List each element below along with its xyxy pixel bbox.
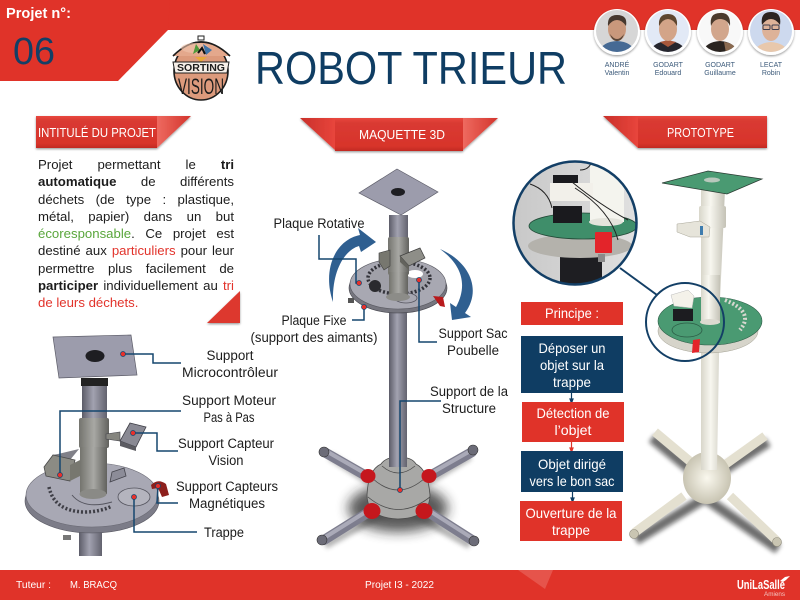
red sensor [433, 296, 445, 307]
arms [324, 450, 472, 540]
arm shadows [325, 456, 470, 545]
supports [379, 250, 390, 270]
team names: GODART [653, 62, 684, 69]
label: support microcontroleur: Support [206, 348, 254, 363]
text block: project description: automatique de différents [38, 174, 234, 189]
base dome [367, 457, 430, 519]
label: support capteurs magnetiques: Support Capteurs [176, 479, 278, 494]
base shadow [348, 484, 448, 532]
ribbon: Prototype [603, 116, 767, 148]
panel: left 3D detail view [25, 335, 279, 556]
arm ends [317, 445, 479, 546]
camera box [677, 221, 710, 237]
header band [0, 0, 800, 81]
zoom ring [646, 283, 724, 361]
team names: ANDRÉ [605, 60, 630, 69]
red part [692, 339, 700, 353]
text block: project description: participer individuellement au tri [38, 278, 234, 293]
label: support de la structure: Support de la [430, 384, 508, 399]
step: detection: l’objet [554, 422, 592, 438]
base shadow [636, 438, 778, 549]
gear [725, 300, 745, 330]
green disc [658, 297, 762, 345]
logo: Sorting Vision [173, 36, 230, 100]
footer: UniLaSalle logo: UniLaSalle [737, 578, 785, 592]
top plate [359, 169, 438, 215]
label: plaque rotative: Plaque Rotative [274, 216, 364, 231]
team names: Guillaume [704, 70, 736, 77]
rotation arrow right [440, 249, 473, 320]
text block: project description [38, 157, 234, 310]
portrait: Lecat Robin [748, 9, 794, 55]
arms [634, 432, 777, 541]
zoom connector [620, 268, 657, 295]
step: detection: Détection de [536, 405, 610, 421]
ribbon: Prototype: PROTOTYPE [667, 125, 734, 140]
footer: tutor label: Tuteur : [16, 579, 51, 591]
label: plaque fixe: Plaque Fixe [282, 313, 346, 328]
footer: project: Projet I3 - 2022 [365, 579, 434, 591]
disc lower [349, 263, 447, 313]
panel: full 3D model [250, 169, 508, 546]
footer: tutor name: M. BRACQ [70, 579, 117, 591]
gear ring [368, 262, 430, 294]
upper disc [26, 463, 158, 527]
lower disc [25, 469, 159, 533]
project number label: Projet n°: [6, 6, 71, 22]
magnetic sensor [151, 481, 169, 497]
column [82, 378, 107, 420]
footer: UniLaSalle logo [737, 576, 790, 598]
title: ROBOT TRIEUR [255, 42, 567, 94]
gear windows [369, 280, 381, 292]
upper pole over disc [701, 275, 720, 323]
label: support sac poubelle [438, 326, 508, 358]
callout dots [356, 278, 422, 492]
step: deposer [521, 336, 623, 393]
footer band [0, 570, 800, 600]
tab under disc [63, 535, 71, 540]
callout dots [58, 352, 160, 500]
arm ends [630, 530, 782, 546]
vision sensor support [106, 432, 120, 441]
ribbon: Maquette 3D [300, 118, 498, 151]
gear rack [49, 487, 112, 512]
arrow 1 [570, 393, 573, 403]
step: principe: Principe : [545, 305, 599, 321]
step: deposer: Déposer un [538, 340, 606, 356]
green plate [662, 171, 762, 194]
collar [699, 206, 726, 228]
step: deposer: objet sur la [540, 357, 604, 373]
rotation arrow left [329, 228, 376, 302]
step: objet dirige: vers le bon sac [530, 473, 614, 489]
step: detection [522, 402, 624, 442]
magnified inset [514, 160, 637, 288]
arrow 3 [571, 492, 574, 502]
trapdoor [118, 488, 150, 506]
disc upper [350, 259, 446, 309]
callout lines [319, 235, 359, 283]
team names: LECAT [760, 62, 783, 69]
label: support capteur vision: Support Capteur [178, 436, 274, 451]
text block: project description: déchets (de type : plastique, [38, 192, 234, 207]
trapdoor [672, 323, 702, 337]
side clip [348, 298, 354, 303]
step: objet dirige [521, 451, 623, 492]
team names: GODART [705, 62, 736, 69]
red joints [360, 469, 436, 519]
step: principe [521, 302, 623, 325]
white box [671, 290, 694, 308]
column [389, 215, 408, 240]
step: deposer: trappe [553, 374, 591, 390]
text block: project description: destiné aux particuliers pour leur [38, 243, 234, 258]
label: support de la structure: Structure [442, 401, 496, 416]
label: support moteur [182, 393, 276, 425]
callout lines [123, 354, 181, 363]
pole [701, 190, 725, 470]
logo: Sorting Vision: SORTING [177, 63, 225, 74]
label: support capteur vision: Vision [208, 453, 244, 468]
label: support capteurs magnetiques: Magnétiques [189, 496, 265, 511]
label: support microcontroleur [182, 348, 279, 380]
project number: 06 [13, 31, 55, 73]
top plate [53, 335, 137, 378]
logo: Sorting Vision: VISION [178, 74, 224, 99]
pole [79, 520, 102, 556]
label: support sac poubelle: Support Sac [438, 326, 508, 341]
decorative corner triangle [207, 291, 240, 323]
arrow 2 [570, 442, 573, 452]
label: support de la structure [430, 384, 508, 416]
ribbon: Intitulé du projet: INTITULÉ DU PROJET [38, 125, 156, 140]
label: support sac poubelle: Poubelle [447, 343, 499, 358]
text block: project description: Projet permettant le tri [38, 157, 234, 172]
label: support capteurs magnetiques [176, 479, 278, 511]
team portraits [594, 9, 794, 77]
portrait: Godart Guillaume [697, 9, 743, 55]
step: ouverture [520, 501, 622, 541]
portrait: André Valentin [594, 9, 640, 55]
step: ouverture: Ouverture de la [526, 505, 617, 521]
label: plaque fixe: (support des aimants) [250, 330, 378, 345]
text block: project description: métal, papier) dans un but [38, 209, 234, 224]
label: plaque fixe [250, 313, 378, 345]
label: support moteur: Support Moteur [182, 393, 276, 408]
team names: Valentin [605, 70, 629, 77]
label: support capteur vision [178, 436, 274, 468]
main pole [389, 310, 407, 467]
text block: project description: de leurs déchets. [38, 295, 138, 310]
portrait: Godart Edouard [645, 9, 691, 55]
panel: principle flow [520, 302, 624, 541]
hub [683, 452, 731, 504]
footer: UniLaSalle logo: Amiens [764, 591, 786, 598]
text block: project description: permettre plus facilement de [38, 261, 234, 276]
team names: Robin [762, 70, 780, 77]
ribbon: Maquette 3D: MAQUETTE 3D [359, 127, 445, 142]
label: trappe: Trappe [204, 525, 244, 540]
lower disc [658, 309, 758, 353]
panel: prototype photo [514, 160, 782, 549]
servo [673, 309, 693, 321]
team names: Edouard [655, 70, 681, 77]
step: ouverture: trappe [552, 522, 590, 538]
label: support moteur: Pas à Pas [204, 410, 255, 425]
team names [605, 60, 783, 77]
step: objet dirige: Objet dirigé [538, 456, 606, 472]
label: support microcontroleur: Microcontrôleur [182, 365, 279, 380]
motor support [52, 449, 79, 460]
ribbon: Intitulé du projet [36, 116, 191, 148]
text block: project description: écoresponsable. Ce projet est [38, 226, 234, 241]
